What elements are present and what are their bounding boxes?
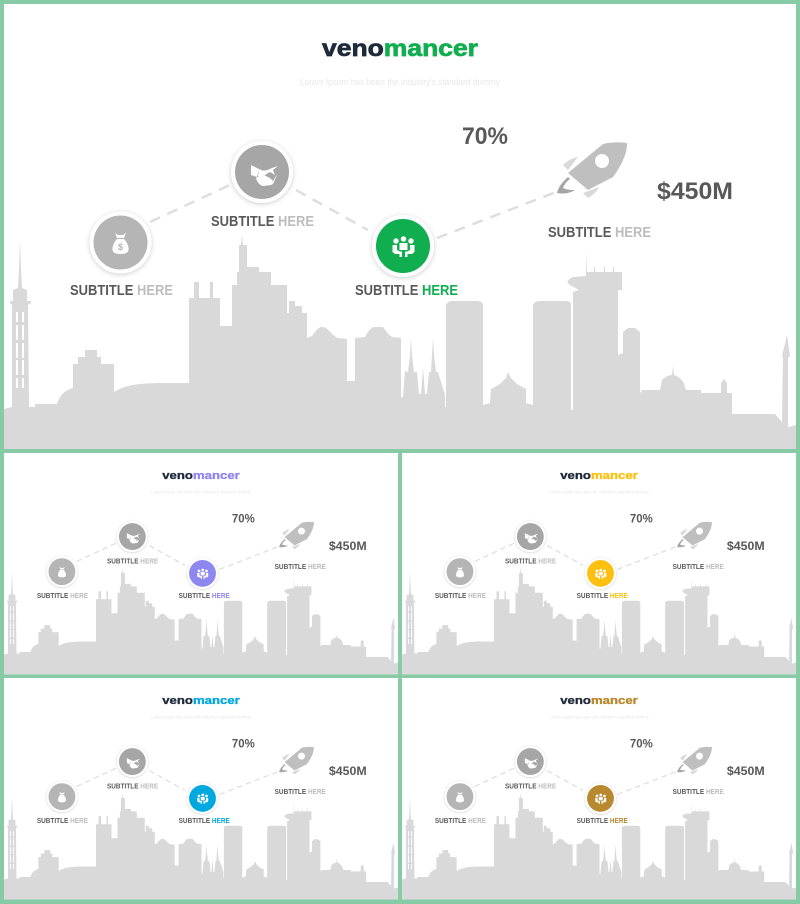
dashed connectors [475, 768, 677, 794]
icon: meeting people [187, 783, 218, 814]
stat: 70%: 70% [232, 737, 255, 751]
label 3: SUBTITLE HERE [355, 282, 458, 299]
stat: $450M: $450M [657, 178, 733, 205]
panel: yellow slide [402, 453, 796, 674]
panel: blue slide [4, 678, 398, 899]
logo: venomancer [162, 695, 240, 707]
label 4: SUBTITLE HERE [673, 562, 724, 571]
label 3: SUBTITLE HERE [577, 816, 628, 825]
label 1: SUBTITLE HERE [37, 591, 88, 600]
icon: handshake [117, 746, 148, 777]
skyline [4, 568, 398, 674]
logo: veno mancer [322, 35, 478, 61]
panel: main slide green [4, 4, 796, 449]
skyline [402, 568, 796, 674]
stat: $450M: $450M [727, 764, 765, 778]
logo: venomancer [162, 470, 240, 482]
label 2: SUBTITLE HERE [211, 213, 314, 230]
stat: 70%: 70% [462, 123, 508, 150]
icon: money bag: $ [118, 242, 123, 252]
icon: handshake [231, 141, 293, 203]
icon: rocket [677, 747, 712, 775]
stat: 70%: 70% [630, 512, 653, 526]
icon: money bag [445, 781, 475, 812]
label 2: SUBTITLE HERE [505, 781, 556, 790]
tagline: Lorem Ipsum has been the industry's standard dummy [300, 77, 500, 87]
label 3: SUBTITLE HERE [179, 591, 230, 600]
tagline: Lorem Ipsum has been the industry's standard dummy [151, 489, 251, 494]
icon: meeting people [187, 558, 218, 589]
icon: meeting people [372, 215, 434, 277]
label 1: SUBTITLE HERE [37, 816, 88, 825]
icon: money bag [47, 556, 77, 587]
stat: 70%: 70% [232, 512, 255, 526]
icon: handshake [515, 521, 546, 552]
icon: rocket [279, 522, 314, 550]
icon: rocket [677, 522, 712, 550]
icon: meeting people [585, 558, 616, 589]
label 1: SUBTITLE HERE [435, 816, 486, 825]
dashed connectors [150, 184, 556, 238]
label 3: SUBTITLE HERE [179, 816, 230, 825]
icon: rocket [279, 747, 314, 775]
panel: purple slide [4, 453, 398, 674]
stat: $450M: $450M [727, 539, 765, 553]
panel: brown slide [402, 678, 796, 899]
label 4: SUBTITLE HERE [673, 787, 724, 796]
label 4: SUBTITLE HERE [275, 562, 326, 571]
label 1: SUBTITLE HERE [435, 591, 486, 600]
icon: meeting people [585, 783, 616, 814]
stat: $450M: $450M [329, 539, 367, 553]
skyline [402, 793, 796, 899]
logo: venomancer [560, 470, 638, 482]
label 2: SUBTITLE HERE [505, 556, 556, 565]
label 3: SUBTITLE HERE [577, 591, 628, 600]
stat: $450M: $450M [329, 764, 367, 778]
icon: money bag [47, 781, 77, 812]
label 2: SUBTITLE HERE [107, 781, 158, 790]
label 1: SUBTITLE HERE [70, 282, 173, 299]
dashed connectors [475, 543, 677, 569]
icon: handshake [117, 521, 148, 552]
icon: money bag [90, 212, 152, 274]
stat: 70%: 70% [630, 737, 653, 751]
logo: venomancer [560, 695, 638, 707]
tagline: Lorem Ipsum has been the industry's standard dummy [549, 489, 649, 494]
label 2: SUBTITLE HERE [107, 556, 158, 565]
icon: handshake [515, 746, 546, 777]
icon: rocket [557, 142, 627, 198]
label 4: SUBTITLE HERE [548, 224, 651, 241]
skyline [4, 235, 796, 449]
dashed connectors [77, 543, 279, 569]
skyline [4, 793, 398, 899]
dashed connectors [77, 768, 279, 794]
tagline: Lorem Ipsum has been the industry's standard dummy [549, 714, 649, 719]
icon: money bag [445, 556, 475, 587]
tagline: Lorem Ipsum has been the industry's standard dummy [151, 714, 251, 719]
label 4: SUBTITLE HERE [275, 787, 326, 796]
